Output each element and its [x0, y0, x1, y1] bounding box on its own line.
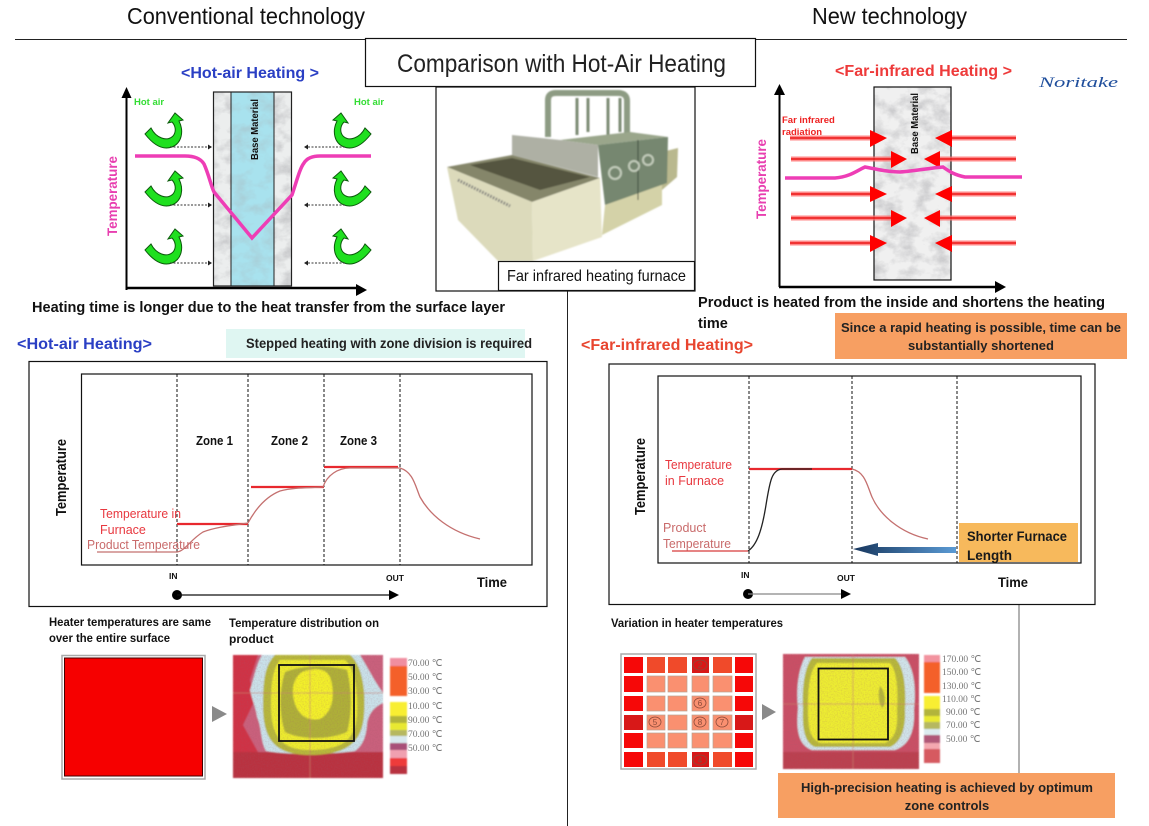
callout: high-precision heating: High-precision heating is achieved by optimum	[801, 780, 1093, 795]
legend: new technology heatmap	[924, 655, 982, 763]
text: hot-air heating time note: Heating time is longer due to the heat transfer from the surface layer	[32, 300, 505, 316]
callout: rapid heating: substantially shortened	[908, 338, 1054, 353]
axis labels: IN	[741, 570, 750, 580]
heading: far-infrared heating lower: <Far-infrared Heating>	[581, 337, 753, 354]
panel: hot-air heating diagram	[104, 65, 384, 296]
axis labels: OUT	[837, 573, 856, 583]
product temperature curve	[97, 468, 480, 552]
legend: conventional heatmap: 30.00 ℃	[408, 687, 443, 697]
y axis label: Temperature	[633, 438, 649, 515]
legend: new technology heatmap: 150.00 ℃	[942, 668, 982, 678]
temperature curve	[135, 156, 371, 238]
zoned heater grid: 2	[698, 661, 703, 670]
chart: hot-air heating temperature profile	[29, 362, 547, 606]
zoned heater grid	[621, 654, 756, 769]
axes	[122, 87, 367, 296]
text: far-infrared heating time note: time	[698, 316, 728, 332]
zoned heater grid: 7	[720, 718, 725, 727]
series labels: in Furnace	[665, 474, 724, 488]
base material slab: Base Material	[249, 99, 261, 160]
heading: hot-air heating: <Hot-air Heating >	[181, 65, 319, 82]
heatmap: new technology	[783, 654, 919, 769]
zoned heater grid: 5	[653, 718, 658, 727]
labels: hot air: Hot air	[134, 97, 164, 108]
panel: far-infrared heating diagram	[753, 63, 1022, 293]
furnace temperature steps	[177, 467, 398, 524]
icons: green hot-air arrows	[145, 113, 371, 264]
chart: far-infrared heating temperature profile	[609, 364, 1095, 604]
text: heater temperatures same: Heater temperatures are same	[49, 615, 211, 629]
arrow: grey	[212, 706, 227, 722]
base material slab	[874, 87, 951, 280]
heading: far-infrared heating: <Far-infrared Heating >	[835, 63, 1012, 80]
legend: new technology heatmap: 130.00 ℃	[942, 682, 982, 692]
furnace direction arrow	[743, 589, 851, 599]
series labels: Temperature	[663, 537, 731, 551]
text: variation in heater temperatures: Variation in heater temperatures	[611, 616, 783, 630]
dashed heat-transfer arrows	[170, 147, 345, 263]
text: far-infrared heating time note: Product is heated from the inside and shortens the heating	[698, 295, 1105, 311]
heatmap: conventional	[233, 655, 383, 778]
uniform heater panel	[62, 656, 205, 779]
legend: new technology heatmap: 50.00 ℃	[946, 735, 981, 745]
zone labels: Zone 1	[196, 433, 233, 448]
heading: new technology: New technology	[812, 3, 967, 29]
text: heater temperatures same: over the entire surface	[49, 631, 170, 645]
legend: new technology heatmap: 90.00 ℃	[946, 708, 981, 718]
legend: new technology heatmap: 110.00 ℃	[942, 695, 981, 705]
temperature curve	[785, 167, 1022, 178]
arrow: grey	[762, 704, 776, 720]
caption: far infrared heating furnace: Far infrared heating furnace	[507, 268, 686, 285]
y axis label: Temperature	[104, 156, 120, 236]
series labels	[87, 507, 200, 552]
text: temperature distribution: product	[229, 632, 274, 646]
zone labels: Zone 2	[271, 433, 308, 448]
axis labels	[741, 570, 1028, 590]
furnace direction arrow	[172, 590, 399, 600]
series labels: Product Temperature	[87, 538, 200, 552]
callout: stepped heating	[226, 329, 532, 358]
axis labels: OUT	[386, 573, 405, 583]
callout: high-precision heating: zone controls	[905, 798, 989, 813]
series labels: Temperature in	[100, 507, 181, 521]
title box: Comparison with Hot-Air Heating	[397, 50, 726, 78]
heading: conventional technology: Conventional technology	[127, 3, 365, 29]
legend: conventional heatmap: 50.00 ℃	[408, 673, 443, 683]
y axis label: Temperature	[753, 139, 769, 219]
series labels: Product	[663, 521, 707, 535]
legend: conventional heatmap: 70.00 ℃	[408, 659, 443, 669]
legend: new technology heatmap: 70.00 ℃	[946, 721, 981, 731]
panel: furnace photo	[436, 87, 695, 291]
product temperature curve	[672, 469, 928, 551]
arrow: shorter length	[853, 543, 956, 556]
axis labels: Time	[477, 574, 507, 590]
zoned heater grid: 6	[698, 699, 703, 708]
radiation arrows	[790, 130, 1016, 252]
text: temperature distribution: Temperature distribution on	[229, 616, 379, 630]
zone labels: Zone 3	[340, 433, 377, 448]
axes	[774, 84, 1006, 293]
label: far infrared radiation: radiation	[782, 127, 822, 138]
legend: conventional heatmap: 50.00 ℃	[408, 744, 443, 754]
panel: hot-air heating diagram: Hot air	[354, 97, 384, 108]
legend: conventional heatmap	[390, 658, 443, 774]
callout: shorter furnace length: Length	[967, 548, 1012, 563]
callout: rapid heating	[835, 313, 1127, 359]
base material slab	[214, 92, 292, 286]
legend: conventional heatmap: 90.00 ℃	[408, 716, 443, 726]
legend: conventional heatmap: 70.00 ℃	[408, 730, 443, 740]
caption: far infrared heating furnace	[498, 262, 694, 290]
callout: high-precision heating	[778, 773, 1115, 818]
title box	[366, 38, 756, 86]
heading: hot-air heating lower: <Hot-air Heating>	[17, 336, 152, 353]
label: far infrared radiation: Far infrared	[782, 115, 835, 126]
axis labels	[169, 571, 507, 590]
base material slab: Base Material	[909, 93, 921, 154]
legend: new technology heatmap: 170.00 ℃	[942, 655, 982, 665]
callout: shorter furnace length: Shorter Furnace	[967, 529, 1067, 544]
callout: stepped heating: Stepped heating with zone division is required	[246, 336, 532, 351]
furnace illustration	[447, 93, 678, 261]
series labels: Temperature	[665, 458, 732, 472]
furnace temperature line	[749, 468, 852, 470]
axis labels: Time	[998, 574, 1028, 590]
series labels	[663, 458, 732, 551]
legend: conventional heatmap: 10.00 ℃	[408, 702, 443, 712]
zoned heater grid: 4	[698, 756, 703, 765]
zoned heater grid: 8	[698, 718, 703, 727]
logo: Noritake: Noritake	[1037, 75, 1119, 91]
series labels: Furnace	[100, 523, 146, 537]
callout: rapid heating: Since a rapid heating is possible, time can be	[841, 320, 1121, 335]
zone labels	[196, 433, 377, 448]
axis labels: IN	[169, 571, 178, 581]
y axis label: Temperature	[54, 439, 70, 516]
callout: shorter furnace length	[959, 523, 1078, 563]
